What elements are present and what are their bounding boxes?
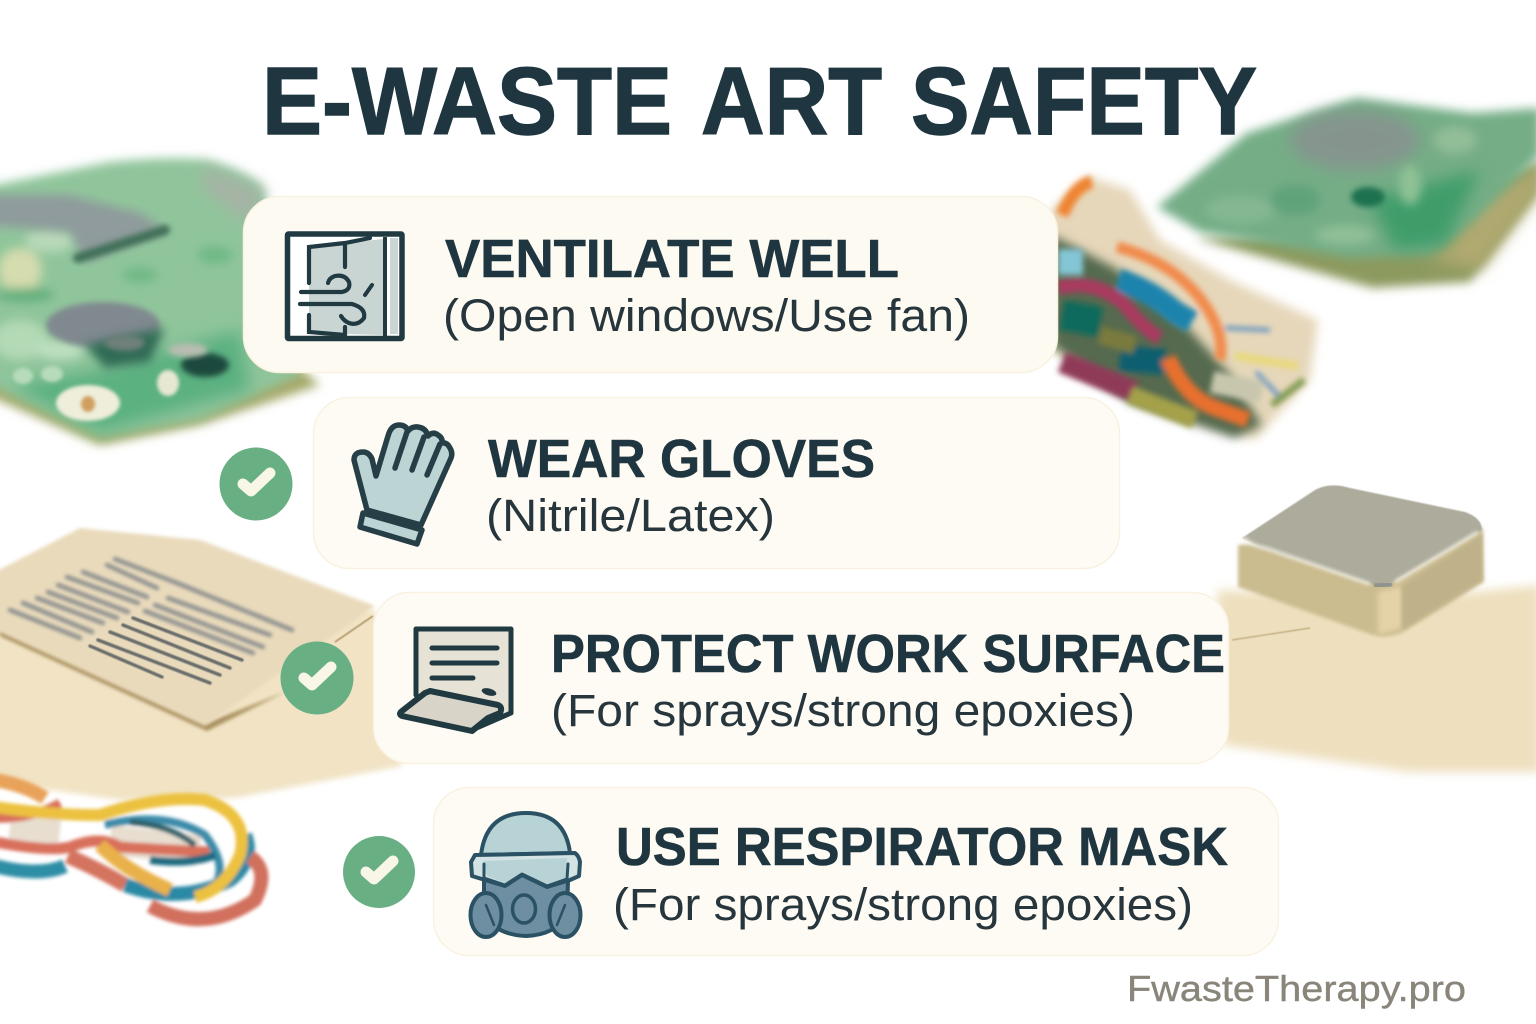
check badge: gloves: [220, 448, 292, 520]
title: E-WASTE: [262, 48, 672, 155]
background photo: wire bundle right: [1050, 177, 1318, 440]
background photo: paper sheets left: [0, 528, 402, 800]
title: SAFETY: [911, 48, 1257, 155]
subtext: (For sprays/strong epoxies): [613, 879, 1193, 930]
title: [262, 48, 1257, 155]
panel: wear gloves: [314, 398, 1120, 568]
title: ART: [701, 48, 882, 155]
heading: USE RESPIRATOR MASK: [616, 817, 1228, 877]
subtext: (Open windows/Use fan): [443, 290, 970, 341]
icon: open window with airflow: [288, 234, 402, 338]
panel: protect work surface: [374, 592, 1228, 764]
heading: WEAR GLOVES: [488, 429, 875, 489]
subtext: (For sprays/strong epoxies): [551, 685, 1135, 736]
icon: respirator mask with goggles: [470, 813, 580, 937]
subtext: (Nitrile/Latex): [486, 490, 775, 541]
background photo: tan surface and metal magnet right: [1217, 485, 1536, 772]
icon: covered surface: [400, 629, 511, 731]
heading: PROTECT WORK SURFACE: [551, 624, 1225, 684]
heading: VENTILATE WELL: [445, 229, 899, 289]
check badge: work surface: [280, 642, 354, 714]
panel: ventilate well: [244, 196, 1058, 372]
panel: use respirator mask: [434, 788, 1278, 956]
icon: glove: [354, 425, 452, 544]
background photo: circuit board right: [1157, 98, 1536, 288]
check badge: respirator: [343, 836, 415, 908]
footer website label: FwasteTherapy.pro: [1127, 968, 1466, 1009]
background photo: coloured wires left: [0, 780, 261, 919]
background photo: circuit board left: [0, 158, 320, 445]
